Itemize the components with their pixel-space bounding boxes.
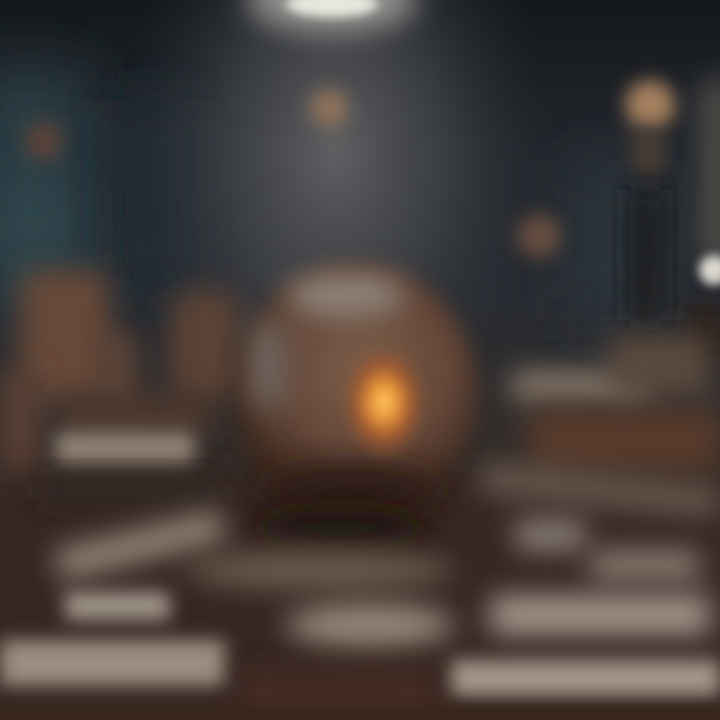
dark column, right [630,190,720,360]
floating orbs [25,80,675,258]
table base [0,470,720,720]
paper stacks, right [450,335,720,696]
paper stacks, left [0,432,226,686]
glowing core [340,344,428,460]
sphere [233,262,477,518]
brown stacks, left [0,270,240,580]
paper pile under sphere [0,510,720,720]
ceiling light [247,0,417,34]
